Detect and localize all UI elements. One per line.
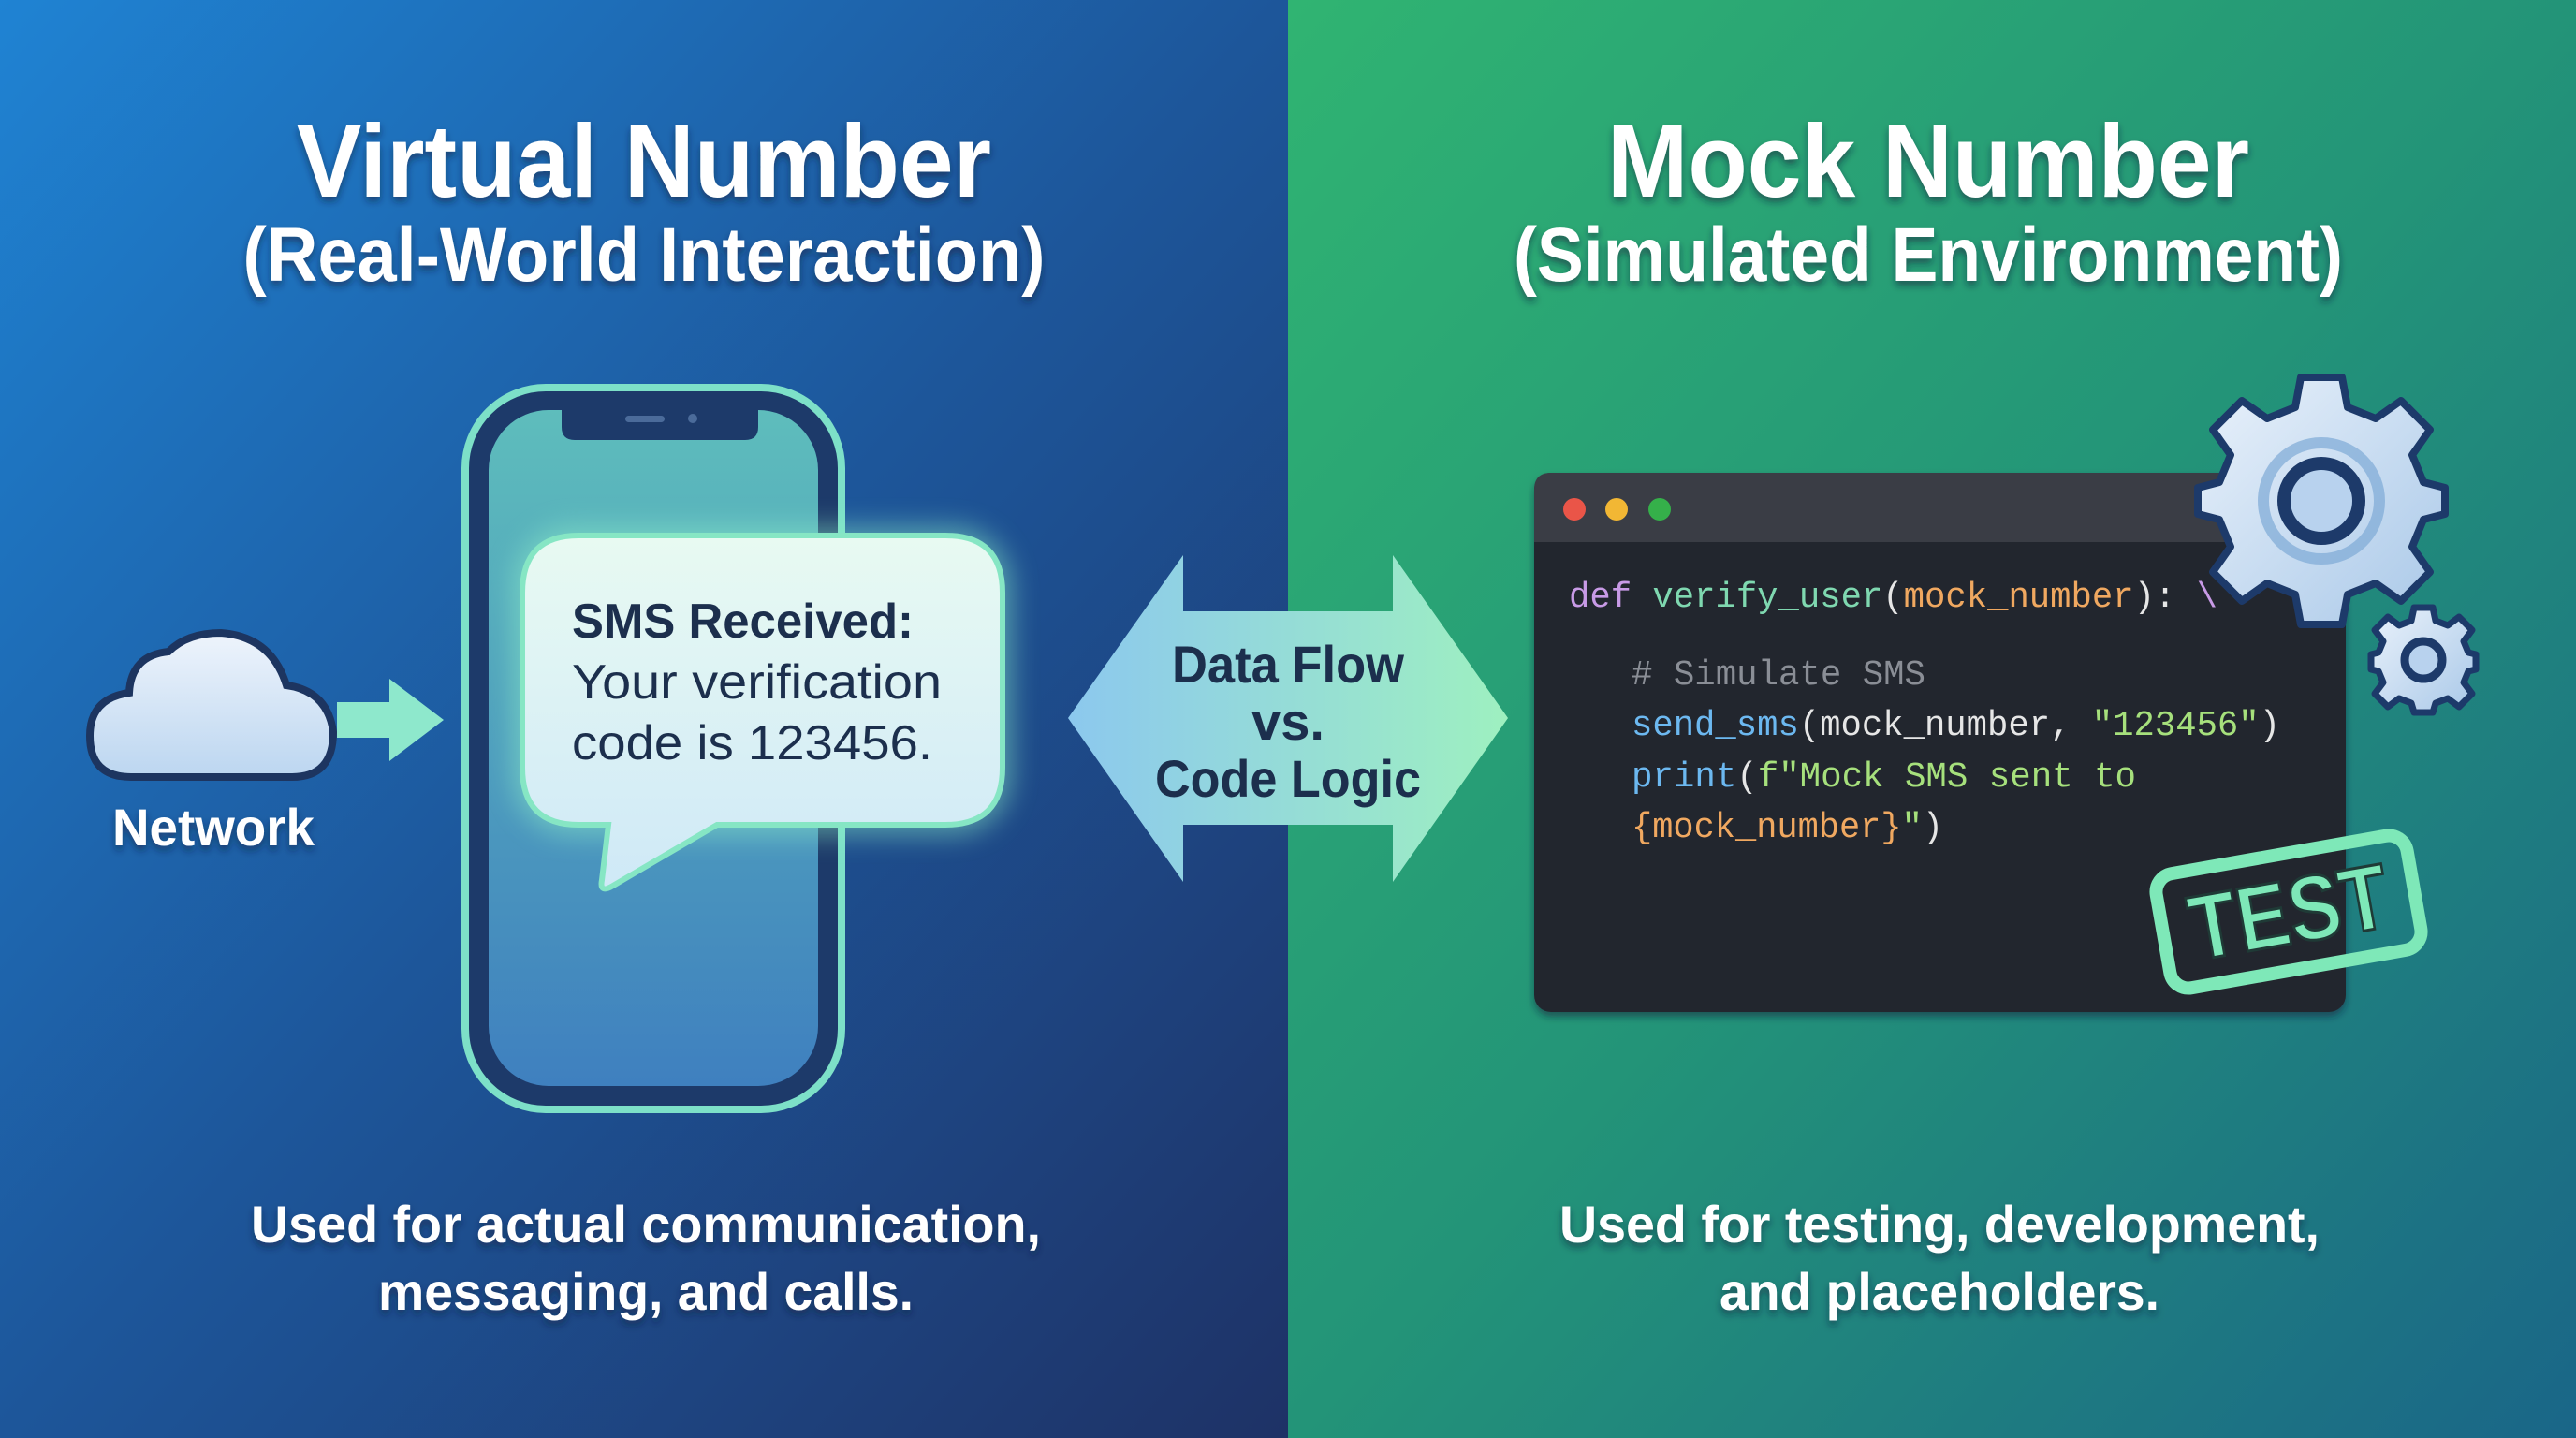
code text: print(f"Mock SMS sent to xyxy=(1632,757,2136,798)
sms text: Your verification xyxy=(572,655,942,710)
title: Virtual Number xyxy=(243,104,1045,298)
caption: mock number use: and placeholders. xyxy=(1720,1262,2159,1321)
title: Mock Number xyxy=(1514,104,2343,298)
caption: mock number use: Used for testing, development, xyxy=(1559,1195,2320,1254)
icon: cloud xyxy=(90,633,333,777)
title: Mock Number: Mock Number xyxy=(1607,104,2249,219)
title: Mock Number: (Simulated Environment) xyxy=(1514,213,2343,298)
icon: small gear xyxy=(2371,608,2476,712)
caption: virtual number use: messaging, and calls. xyxy=(378,1262,914,1321)
arrow: cloud to phone xyxy=(337,679,444,761)
caption: virtual number use xyxy=(251,1195,1041,1321)
code text: # Simulate SMS xyxy=(1632,655,1925,696)
title: Virtual Number: Virtual Number xyxy=(297,104,991,219)
label: Network: Network xyxy=(112,798,315,857)
double arrow: data flow vs code logic xyxy=(1068,555,1508,882)
sms text: SMS Received: xyxy=(572,594,914,649)
title: Virtual Number: (Real-World Interaction) xyxy=(243,213,1045,298)
right background xyxy=(1288,0,2576,1438)
code text: def verify_user(mock_number): \ xyxy=(1569,578,2217,618)
phone xyxy=(465,388,842,1109)
code window xyxy=(1534,473,2346,1012)
double arrow: data flow vs code logic: Data Flow xyxy=(1172,635,1404,694)
sms text: code is 123456. xyxy=(572,716,932,770)
double arrow: data flow vs code logic: vs. xyxy=(1251,692,1325,751)
double arrow: data flow vs code logic: Code Logic xyxy=(1155,749,1421,808)
caption: mock number use xyxy=(1559,1195,2320,1321)
code text: send_sms(mock_number, "123456") xyxy=(1632,706,2280,746)
code text: {mock_number}") xyxy=(1632,808,1943,848)
left background xyxy=(0,0,1288,1438)
code text xyxy=(1569,578,2280,848)
caption: virtual number use: Used for actual communication, xyxy=(251,1195,1041,1254)
sms bubble xyxy=(513,526,1012,888)
icon: large gear xyxy=(2198,377,2445,624)
stamp: TEST: TEST xyxy=(2181,844,2396,980)
sms text xyxy=(572,594,942,770)
